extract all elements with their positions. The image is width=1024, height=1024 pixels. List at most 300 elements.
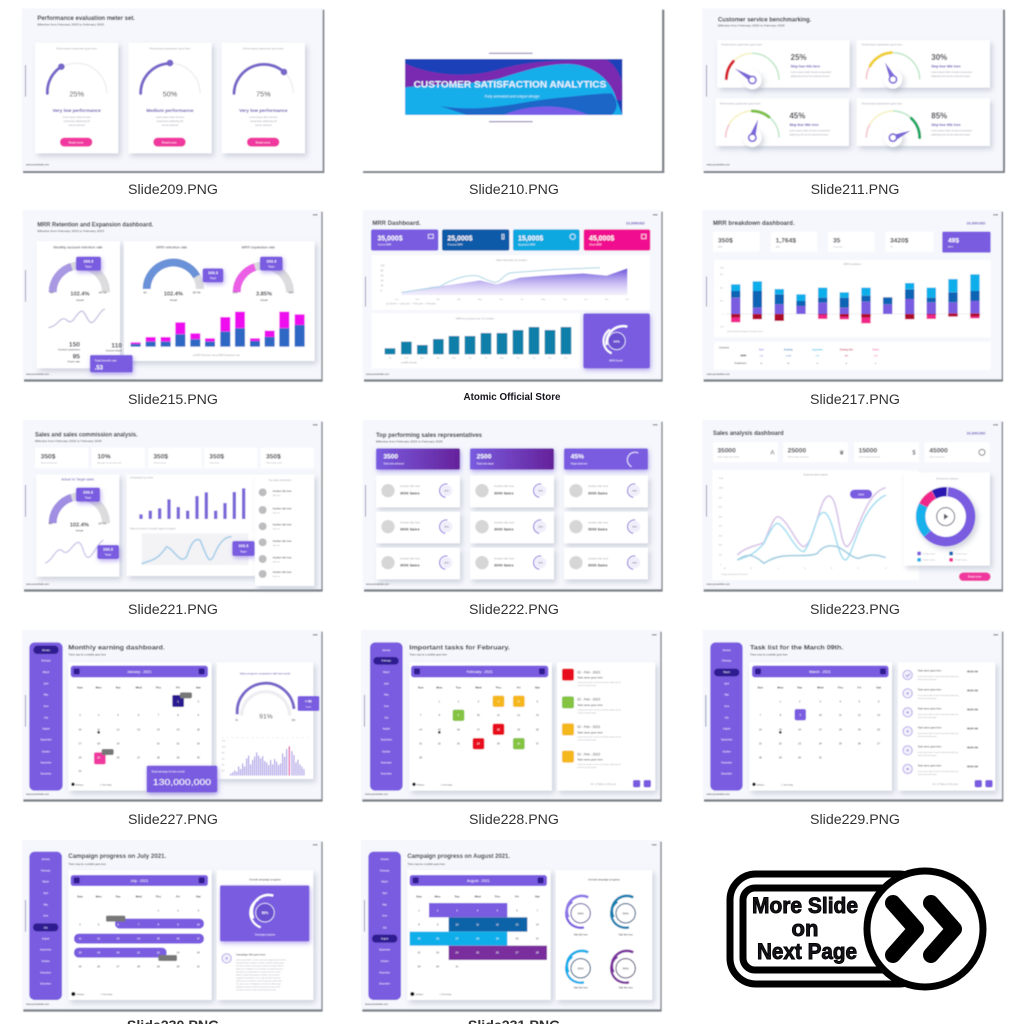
thumbnail: Slide222 top sales representatives: Another title here xyxy=(494,557,515,561)
thumbnail: Slide229 task list calendar: ◻ Task today xyxy=(781,783,793,786)
thumbnail: Slide227 monthly earning calendar: 8 xyxy=(177,713,179,717)
thumbnail: Slide231 campaign progress August: 23 xyxy=(436,951,440,955)
thumbnail: Slide231 campaign progress August: March xyxy=(381,881,389,884)
thumbnail: Slide216 MRR dashboard: Sep xyxy=(563,299,568,301)
thumbnail: Slide221 sales commission analysis: Sales by month vs monthly target for quarter xyxy=(130,527,176,530)
thumbnail: Slide231 campaign progress August: Sun xyxy=(416,894,422,898)
thumbnail: Slide223 sales analysis dashboard: 10,000USD xyxy=(967,431,986,435)
thumbnail: Slide227 monthly earning calendar: 28 xyxy=(157,755,160,759)
thumbnail: Slide216 MRR dashboard: 10,000USD xyxy=(626,221,645,225)
thumbnail: Slide230 campaign progress July: irure dolor in reprehenderit in voluptate velit esse cillum xyxy=(236,971,281,974)
thumbnail: Slide216 MRR dashboard: 20 xyxy=(381,286,384,288)
thumbnail: Slide228 important tasks calendar: 16 xyxy=(457,727,460,731)
badge text xyxy=(752,893,858,964)
thumbnail: Slide229 task list calendar: 28 xyxy=(759,755,762,759)
thumbnail: Slide217 MRR breakdown dashboard: 170 xyxy=(874,356,878,358)
thumbnail: Slide223 sales analysis dashboard: Product A Product B Product C xyxy=(721,573,749,576)
thumbnail: Slide211 customer service gauges: adipiscing elit sed do eiusmod tempor xyxy=(789,134,829,137)
thumbnail: Slide217 MRR breakdown dashboard: ARPU xyxy=(948,246,954,249)
thumbnail: Slide230 campaign progress July: 20 xyxy=(117,951,120,955)
thumbnail: Slide228 important tasks calendar: January xyxy=(382,649,391,652)
thumbnail: Slide231 campaign progress August: May xyxy=(382,904,388,906)
thumbnail: Slide211 customer service gauges: Step four title here xyxy=(789,123,819,127)
thumbnail: Slide228 important tasks calendar: Tue xyxy=(456,685,461,689)
thumbnail: Slide217 MRR breakdown dashboard: 3420$ xyxy=(890,238,909,245)
thumbnail: Slide228 important tasks calendar: October xyxy=(382,750,391,753)
thumbnail: Slide215 MRR retention dashboard xyxy=(23,210,323,382)
thumbnail: Slide230 campaign progress July: March xyxy=(42,881,50,884)
thumbnail: Slide222 top sales representatives: Total units achieved xyxy=(383,462,404,465)
thumbnail: Slide221 sales commission analysis: 102.4% xyxy=(70,523,89,529)
thumbnail: Slide222 top sales representatives: 90% xyxy=(444,527,449,529)
thumbnail: Slide223 sales analysis dashboard: Revenue by category xyxy=(936,478,959,481)
thumbnail: Slide231 campaign progress August: Thu xyxy=(495,894,500,898)
thumbnail: Slide229 task list calendar: January xyxy=(722,649,732,652)
badge: More Slide on Next Page xyxy=(730,871,983,987)
thumbnail: Slide227 monthly earning calendar: 5 xyxy=(117,713,119,717)
thumbnail: Slide231 campaign progress August: October xyxy=(381,960,389,963)
thumbnail: Slide227 monthly earning calendar xyxy=(22,630,323,802)
thumbnail: Slide231 campaign progress August: November xyxy=(379,971,390,974)
thumbnail: Slide216 MRR dashboard: Nov xyxy=(548,358,552,360)
thumbnail: Slide209 performance meters xyxy=(22,8,324,173)
thumbnail: Slide216 MRR dashboard: Data rates/rate by location xyxy=(496,258,528,262)
thumbnail: Slide229 task list calendar: 30 xyxy=(798,755,802,759)
thumbnail: Slide228 important tasks calendar: Mon xyxy=(436,685,443,689)
thumbnail: Slide227 monthly earning calendar: September xyxy=(40,739,52,742)
thumbnail: Slide227 monthly earning calendar: 16 xyxy=(197,727,200,731)
thumbnail: Slide215 MRR retention dashboard: Total benefit rate xyxy=(95,358,117,362)
thumbnail: Slide230 campaign progress July: May xyxy=(43,904,49,906)
thumbnail: Slide217 MRR breakdown dashboard: 15 xyxy=(787,363,790,365)
thumbnail: Slide209 performance meters: Read more xyxy=(69,140,84,144)
thumbnail: Slide229 task list calendar: 18 xyxy=(839,727,842,731)
thumbnail: Slide221 sales commission analysis: Sub text xyxy=(273,494,280,497)
thumbnail: Slide223 sales analysis dashboard: Product name xyxy=(923,552,936,555)
thumbnail: Slide228 important tasks calendar: 5 xyxy=(518,699,520,703)
thumbnail: Slide217 MRR breakdown dashboard: 170 xyxy=(816,356,820,358)
thumbnail: Slide227 monthly earning calendar: Monthly earning dashboard. xyxy=(68,646,165,652)
thumbnail: Slide221 sales commission analysis: Another title here xyxy=(273,490,292,493)
thumbnail: Slide231 campaign progress August: 16 xyxy=(436,937,440,941)
caption: Slide221: Slide221.PNG xyxy=(128,602,218,618)
thumbnail: Slide216 MRR dashboard: May xyxy=(452,358,456,360)
thumbnail: Slide209 performance meters: sed do eiusmod xyxy=(68,125,86,127)
thumbnail: Slide230 campaign progress July: 12 xyxy=(97,937,101,941)
thumbnail: Slide231 campaign progress August: August xyxy=(381,938,389,941)
thumbnail: Slide231 campaign progress August: February xyxy=(380,869,390,872)
thumbnail: Slide229 task list calendar: 25 xyxy=(839,742,842,746)
thumbnail: Slide231 campaign progress August: Task title here xyxy=(618,933,634,936)
thumbnail: Slide216 MRR dashboard: 0 xyxy=(381,291,383,293)
thumbnail: Slide229 task list calendar: 08:00 AM xyxy=(967,727,978,730)
thumbnail: Slide216 MRR dashboard xyxy=(363,210,663,382)
thumbnail: Slide229 task list calendar: November xyxy=(721,761,732,764)
thumbnail: Slide210 title slide: CUSTOMER SATISFACTION ANALYTICS xyxy=(414,80,606,90)
thumbnail: Slide228 important tasks calendar: 23 xyxy=(457,742,460,746)
thumbnail: Slide229 task list calendar: 23 xyxy=(798,742,802,746)
thumbnail: Slide230 campaign progress July: Lorem ipsum dolor sit amet consectetur adipiscing elit sed do xyxy=(236,959,285,962)
thumbnail: Slide228 important tasks calendar: 21 xyxy=(419,742,423,746)
thumbnail: Slide215 MRR retention dashboard: 102.4% xyxy=(70,292,90,298)
thumbnail: Slide230 campaign progress July: inventore veritatis et quasi architecto beatae vitae xyxy=(236,989,276,992)
thumbnail: Slide231 campaign progress August: Task title here xyxy=(573,986,589,989)
thumbnail: Slide216 MRR dashboard: 100 xyxy=(381,266,385,268)
thumbnail: Slide231 campaign progress August: September xyxy=(379,949,391,952)
thumbnail: Slide230 campaign progress July: 26 xyxy=(97,965,101,969)
thumbnail: Slide215 MRR retention dashboard: MRR Retention and Expansion dashboard. xyxy=(37,223,154,229)
thumbnail: Slide231 campaign progress August: Task title here xyxy=(573,933,589,936)
thumbnail: Slide231 campaign progress August: 5 xyxy=(497,909,499,913)
thumbnail: Slide229 task list calendar: 16 xyxy=(798,727,802,731)
thumbnail: Slide229 task list calendar: Task name goes here xyxy=(918,670,942,673)
thumbnail: Slide215 MRR retention dashboard: 95 xyxy=(73,354,80,361)
thumbnail: Slide229 task list calendar: 31 xyxy=(819,755,822,759)
thumbnail: Slide228 important tasks calendar: 22 xyxy=(438,742,441,746)
thumbnail: Slide230 campaign progress July: October xyxy=(42,960,50,963)
thumbnail: Slide228 important tasks calendar: sed do eiusmod tempor xyxy=(577,711,597,714)
thumbnail: Slide228 important tasks calendar: September xyxy=(381,739,392,742)
thumbnail: Slide227 monthly earning calendar: 800 xyxy=(222,753,224,755)
thumbnail: Slide228 important tasks calendar: Task name goes here xyxy=(577,676,603,680)
thumbnail: Slide231 campaign progress August: Fri xyxy=(515,894,519,898)
thumbnail: Slide217 MRR breakdown dashboard: 8 xyxy=(846,363,848,365)
thumbnail: Slide211 customer service gauges: Performance parameter goes here xyxy=(862,43,903,47)
icon: double chevron circle xyxy=(867,871,983,987)
thumbnail: Slide217 MRR breakdown dashboard: MRR breakdown xyxy=(844,263,862,266)
thumbnail: Slide216 MRR dashboard: Sep xyxy=(516,358,521,360)
thumbnail: Slide211 customer service gauges: 30% xyxy=(931,53,947,62)
thumbnail: Slide221 sales commission analysis: Sub text xyxy=(273,560,280,563)
thumbnail: Slide230 campaign progress July: 19 xyxy=(97,951,101,955)
thumbnail: Slide222 top sales representatives: Another title here xyxy=(588,484,609,488)
thumbnail: Slide222 top sales representatives: Another title here xyxy=(400,520,421,524)
thumbnail: Slide227 monthly earning calendar: 12 xyxy=(117,727,120,731)
thumbnail: Slide227 monthly earning calendar: ◻ Task today xyxy=(100,783,112,786)
caption: Slide209: Slide209.PNG xyxy=(128,182,218,198)
thumbnail: Slide230 campaign progress July: 8 xyxy=(158,923,160,927)
thumbnail: Slide231 campaign progress August xyxy=(361,840,662,1012)
thumbnail: Slide231 campaign progress August: 9 xyxy=(437,923,439,927)
thumbnail: Slide227 monthly earning calendar: January - 2021 xyxy=(127,670,152,674)
thumbnail: Slide231 campaign progress August: April xyxy=(382,892,387,895)
thumbnail: Slide222 top sales representatives: ••• xyxy=(653,423,658,428)
thumbnail: Slide228 important tasks calendar: Lorem ipsum dolor sit amet consectetur adipiscing elit xyxy=(577,763,621,766)
thumbnail: Slide229 task list calendar: Lorem ipsum dolor sit amet consectetur adipiscing xyxy=(918,770,958,773)
thumbnail: Slide227 monthly earning calendar: July xyxy=(44,717,49,719)
thumbnail: Slide216 MRR dashboard: Oct xyxy=(584,298,588,301)
thumbnail: Slide229 task list calendar: April xyxy=(724,682,729,685)
thumbnail: Slide223 sales analysis dashboard: 1200 xyxy=(719,478,724,480)
thumbnail: Slide228 important tasks calendar: July xyxy=(384,717,389,719)
thumbnail: Slide223 sales analysis dashboard: www.yourwebsite.com xyxy=(707,583,730,586)
thumbnail: Slide216 MRR dashboard: May xyxy=(478,299,482,301)
thumbnail: Slide227 monthly earning calendar: June xyxy=(43,706,49,708)
thumbnail: Slide209 performance meters: Very low performance xyxy=(52,108,101,113)
thumbnail: Slide230 campaign progress July: 15 xyxy=(157,937,160,941)
thumbnail: Slide221 sales commission analysis: 103.3 xyxy=(238,543,249,548)
thumbnail: Slide230 campaign progress July: Campaign title goes here xyxy=(236,953,266,957)
thumbnail: Slide230 campaign progress July: 1 xyxy=(158,909,160,913)
thumbnail: Slide215 MRR retention dashboard: 102.4% xyxy=(164,292,183,298)
thumbnail: Slide215 MRR retention dashboard: Actual xyxy=(260,298,268,302)
thumbnail: Slide231 campaign progress August: Task title here xyxy=(618,986,634,989)
thumbnail: Slide215 MRR retention dashboard: MRR retention rate xyxy=(156,245,187,249)
thumbnail: Slide223 sales analysis dashboard: Total commission paid xyxy=(859,455,881,458)
thumbnail: Slide230 campaign progress July: 4 xyxy=(79,923,81,927)
thumbnail: Slide231 campaign progress August: Overall campaign progress xyxy=(588,878,621,882)
thumbnail: Slide231 campaign progress August: 15 xyxy=(418,937,421,941)
thumbnail: Slide228 important tasks calendar: There may be a subtitle goes here xyxy=(409,653,448,656)
thumbnail: Slide216 MRR dashboard: Mar xyxy=(421,357,424,360)
thumbnail: Slide223 sales analysis dashboard: B xyxy=(751,568,753,570)
thumbnail: Slide216 MRR dashboard: Jul xyxy=(521,299,524,301)
thumbnail: Slide221 sales commission analysis: 103.3 xyxy=(103,547,114,552)
thumbnail: Slide229 task list calendar: Fri xyxy=(857,685,861,689)
thumbnail: Slide216 MRR dashboard: 35,000$ xyxy=(377,236,403,243)
thumbnail: Slide227 monthly earning calendar: Fri xyxy=(176,685,180,689)
thumbnail: Slide221 sales commission analysis: Another title here xyxy=(273,540,292,543)
thumbnail: Slide222 top sales representatives: Total units target xyxy=(477,462,494,465)
thumbnail: Slide222 top sales representatives: 90% xyxy=(632,527,637,529)
thumbnail: Slide227 monthly earning calendar: 9 xyxy=(198,713,200,717)
thumbnail: Slide209 performance meters: Lorem ipsum dolor sit amet xyxy=(249,116,278,119)
thumbnail: Slide230 campaign progress July: 22 xyxy=(157,951,160,955)
thumbnail: Slide231 campaign progress August: 4 xyxy=(477,909,479,913)
thumbnail: Slide231 campaign progress August: 6 xyxy=(516,909,518,913)
thumbnail: Slide223 sales analysis dashboard: G xyxy=(885,568,887,570)
thumbnail: Slide217 MRR breakdown dashboard xyxy=(702,210,1003,382)
thumbnail: Slide229 task list calendar: No. of Tasks on this year xyxy=(933,783,958,786)
thumbnail: Slide227 monthly earning calendar: 24 xyxy=(79,755,82,759)
thumbnail: Slide217 MRR breakdown dashboard: 10,000USD xyxy=(967,221,986,225)
thumbnail: Slide227 monthly earning calendar: 17 xyxy=(79,742,82,746)
thumbnail: Slide223 sales analysis dashboard: 0 xyxy=(720,564,722,566)
thumbnail: Slide216 MRR dashboard: MRR by product over 12 months xyxy=(456,317,495,321)
thumbnail: Slide221 sales commission analysis: 350$ xyxy=(209,453,224,460)
thumbnail: Slide217 MRR breakdown dashboard: 140 xyxy=(760,356,764,358)
thumbnail: Slide230 campaign progress July xyxy=(22,840,323,1012)
thumbnail: Slide209 performance meters: Read more xyxy=(162,140,177,144)
thumbnail: Slide227 monthly earning calendar: + 90 xyxy=(305,700,312,704)
thumbnail: Slide217 MRR breakdown dashboard: 400 xyxy=(720,287,723,289)
thumbnail: Slide230 campaign progress July: June xyxy=(43,916,49,918)
thumbnail: Slide217 MRR breakdown dashboard: -100 xyxy=(720,327,723,329)
thumbnail: Slide228 important tasks calendar: ••• xyxy=(652,633,657,638)
thumbnail: Slide229 task list calendar: September xyxy=(721,739,733,742)
thumbnail: Slide215 MRR retention dashboard: Churn rate xyxy=(67,360,81,364)
thumbnail: Slide211 customer service gauges: Performance parameter goes here xyxy=(721,43,762,47)
thumbnail: Slide211 customer service gauges: 45% xyxy=(789,112,805,121)
thumbnail: Slide211 customer service gauges: Performance parameter goes here xyxy=(720,101,761,105)
thumbnail: Slide230 campaign progress July: ◻ Task today xyxy=(101,993,112,996)
thumbnail: Slide230 campaign progress July: Mon xyxy=(96,894,102,898)
thumbnail: Slide229 task list calendar: Tue xyxy=(797,685,803,689)
thumbnail: Slide221 sales commission analysis: Target xyxy=(240,550,247,553)
thumbnail: Slide228 important tasks calendar: Lorem ipsum dolor sit amet consectetur adipiscing elit xyxy=(577,708,621,711)
caption: Slide228: Slide228.PNG xyxy=(469,812,559,828)
thumbnail: Slide221 sales commission analysis: Total target sales xyxy=(266,462,282,465)
thumbnail: Slide229 task list calendar: ••• xyxy=(993,633,999,638)
thumbnail: Slide227 monthly earning calendar: Wed xyxy=(136,685,142,689)
thumbnail: Slide229 task list calendar: www.yourwebsite.com xyxy=(707,793,730,796)
thumbnail: Slide221 sales commission analysis: Average commission rate xyxy=(97,462,122,465)
thumbnail: Slide229 task list calendar: Lorem ipsum dolor sit amet consectetur adipiscing xyxy=(918,732,958,735)
thumbnail: Slide217 MRR breakdown dashboard: Churn xyxy=(872,349,880,352)
thumbnail: Slide230 campaign progress July: 7 xyxy=(138,923,140,927)
thumbnail: Slide228 important tasks calendar: April xyxy=(384,682,389,685)
thumbnail: Slide228 important tasks calendar: 8 xyxy=(439,713,441,717)
thumbnail: Slide211 customer service gauges: www.yourwebsite.com xyxy=(707,164,730,167)
thumbnail: Slide230 campaign progress July: mollit anim id est laborum sed ut perspiciatis unde omnis xyxy=(236,980,282,983)
thumbnail: Slide223 sales analysis dashboard: 300 xyxy=(719,545,723,547)
thumbnail: Slide227 monthly earning calendar: 19 xyxy=(117,742,120,746)
thumbnail: Slide230 campaign progress July: laboris nisi ut aliquip ex ea commodo consequat duis aute xyxy=(236,968,283,971)
thumbnail: Slide228 important tasks calendar: 10 xyxy=(477,713,480,717)
thumbnail: Slide215 MRR retention dashboard: 3.85% xyxy=(256,292,272,298)
thumbnail: Slide231 campaign progress August: December xyxy=(379,983,390,986)
thumbnail: Slide217 MRR breakdown dashboard: ARR xyxy=(776,246,780,249)
thumbnail: Slide230 campaign progress July: September xyxy=(40,949,52,952)
thumbnail: Slide221 sales commission analysis: 10% xyxy=(97,453,111,460)
thumbnail: Slide216 MRR dashboard: Aug xyxy=(500,357,504,360)
thumbnail: Slide222 top sales representatives: Target achieved xyxy=(571,462,588,465)
thumbnail: Slide231 campaign progress August: 7 xyxy=(537,909,539,913)
thumbnail: Slide231 campaign progress August: 17 xyxy=(456,937,459,941)
thumbnail: Slide217 MRR breakdown dashboard: Customers xyxy=(833,246,843,249)
thumbnail: Slide229 task list calendar: Lorem ipsum dolor sit amet consectetur adipiscing xyxy=(918,694,958,697)
thumbnail: Slide231 campaign progress August: 18 xyxy=(476,937,480,941)
thumbnail: Slide217 MRR breakdown dashboard: New xyxy=(759,349,764,352)
thumbnail: Slide217 MRR breakdown dashboard: MRR breakdown dashboard. xyxy=(713,221,795,227)
thumbnail: Slide230 campaign progress July: 21 xyxy=(137,951,141,955)
thumbnail: Slide216 MRR dashboard: Jan xyxy=(395,299,398,301)
thumbnail: Slide215 MRR retention dashboard: Current churn xyxy=(106,348,123,352)
thumbnail: Slide222 top sales representatives: Another title here xyxy=(400,484,421,488)
thumbnail: Slide217 MRR breakdown dashboard: Upgrades xyxy=(812,349,823,352)
thumbnail: Slide209 performance meters: 25% xyxy=(69,89,84,98)
thumbnail: Slide230 campaign progress July: Sat xyxy=(196,894,201,898)
thumbnail: Slide227 monthly earning calendar: 31 xyxy=(79,769,82,773)
thumbnail: Slide230 campaign progress July: 18 xyxy=(79,951,82,955)
thumbnail: Slide223 sales analysis dashboard: 15000 xyxy=(859,447,877,454)
thumbnail: Slide229 task list calendar: sed do eiusmod tempor xyxy=(918,678,937,681)
thumbnail: Slide227 monthly earning calendar: 4 xyxy=(98,713,100,717)
thumbnail: Slide223 sales analysis dashboard: Sales target achieved xyxy=(788,455,809,458)
thumbnail: Slide229 task list calendar: Thu xyxy=(838,685,843,689)
thumbnail: Slide227 monthly earning calendar: December xyxy=(41,773,52,776)
thumbnail: Slide222 top sales representatives: 90% xyxy=(538,491,543,493)
thumbnail: Slide217 MRR breakdown dashboard: LTV xyxy=(890,247,894,249)
thumbnail: Slide215 MRR retention dashboard: Actual xyxy=(76,298,84,302)
caption: Slide211: Slide211.PNG xyxy=(811,182,899,198)
thumbnail: Slide228 important tasks calendar: 02 - Feb - 2023 xyxy=(577,725,600,729)
thumbnail: Slide223 sales analysis dashboard: 45000 xyxy=(929,447,948,454)
thumbnail: Slide215 MRR retention dashboard: Target xyxy=(85,265,92,268)
thumbnail: Slide231 campaign progress August: August - 2021 xyxy=(467,879,490,883)
thumbnail: Slide229 task list calendar: 08:00 AM xyxy=(967,690,978,693)
thumbnail: Slide229 task list calendar: sed do eiusmod tempor xyxy=(918,716,937,719)
thumbnail: Slide228 important tasks calendar: 14 xyxy=(419,727,423,731)
thumbnail: Slide230 campaign progress July: Fri xyxy=(176,894,180,898)
thumbnail: Slide215 MRR retention dashboard: Current customers xyxy=(58,348,81,352)
thumbnail: Slide210 title slide: Fully animated and unique design xyxy=(485,94,539,98)
thumbnail: Slide228 important tasks calendar: Important tasks for February. xyxy=(409,646,510,652)
thumbnail: Slide231 campaign progress August: 13 xyxy=(515,923,519,927)
thumbnail: Slide221 sales commission analysis: 0% xyxy=(49,523,52,525)
thumbnail: Slide227 monthly earning calendar: Target xyxy=(306,706,312,709)
caption: Slide229: Slide229.PNG xyxy=(810,812,900,828)
thumbnail: Slide229 task list calendar: 2 xyxy=(799,699,801,703)
thumbnail: Slide221 sales commission analysis: Another title here xyxy=(273,524,292,527)
thumbnail: Slide221 sales commission analysis: Actual Vs Target sales xyxy=(61,478,94,482)
thumbnail: Slide209 performance meters: 75% xyxy=(256,89,271,98)
thumbnail: Slide217 MRR breakdown dashboard: Customers xyxy=(734,362,747,365)
thumbnail: Slide229 task list calendar: 11 xyxy=(839,713,842,717)
thumbnail: Slide221 sales commission analysis: 103.3 xyxy=(83,489,94,494)
thumbnail: Slide215 MRR retention dashboard: Effective from February 2023 to February 2025 xyxy=(37,229,105,233)
thumbnail: Slide223 sales analysis dashboard: $ xyxy=(912,450,916,456)
thumbnail: Slide223 sales analysis dashboard: 900 xyxy=(719,497,723,499)
thumbnail: Slide227 monthly earning calendar: 21 xyxy=(157,742,160,746)
thumbnail: Slide228 important tasks calendar xyxy=(361,630,662,802)
thumbnail: Slide227 monthly earning calendar: 6 xyxy=(138,713,140,717)
thumbnail: Slide230 campaign progress July: Thu xyxy=(156,894,161,898)
thumbnail: Slide227 monthly earning calendar: 600 xyxy=(222,759,224,761)
thumbnail: Slide227 monthly earning calendar: November xyxy=(41,761,52,764)
thumbnail: Slide222 top sales representatives: 3000 Sales xyxy=(494,564,514,568)
thumbnail: Slide215 MRR retention dashboard: 40T 0% xyxy=(99,293,107,295)
thumbnail: Slide229 task list calendar: 4 xyxy=(840,699,842,703)
thumbnail: Slide215 MRR retention dashboard: 103.3 xyxy=(83,258,94,263)
thumbnail: Slide230 campaign progress July: 6 xyxy=(117,923,119,927)
thumbnail: Slide216 MRR dashboard: 15,000$ xyxy=(518,236,543,243)
thumbnail: Slide228 important tasks calendar: sed do eiusmod tempor xyxy=(577,766,597,769)
thumbnail: Slide229 task list calendar: 12 xyxy=(858,713,861,717)
thumbnail: Slide231 campaign progress August: 21 xyxy=(536,937,539,941)
thumbnail: Slide229 task list calendar: Lorem ipsum dolor sit amet consectetur adipiscing xyxy=(918,713,958,716)
thumbnail: Slide231 campaign progress August: 26 xyxy=(496,951,499,955)
thumbnail: Slide215 MRR retention dashboard: Monthly account retention rate xyxy=(53,245,103,249)
thumbnail: Slide227 monthly earning calendar: ••• xyxy=(313,633,318,638)
thumbnail: Slide229 task list calendar: August xyxy=(723,728,731,731)
thumbnail: Slide222 top sales representatives: 3000 Sales xyxy=(588,491,608,495)
thumbnail: Slide211 customer service gauges: Customer service benchmarking. xyxy=(718,18,812,24)
thumbnail: Slide230 campaign progress July: 11 xyxy=(79,937,82,941)
thumbnail: Slide222 top sales representatives: 3000 Sales xyxy=(400,491,420,495)
thumbnail: Slide223 sales analysis dashboard: F xyxy=(858,568,860,570)
thumbnail: Slide231 campaign progress August: There may be a subtitle goes here xyxy=(407,863,446,866)
thumbnail: Slide231 campaign progress August: 28 xyxy=(536,951,539,955)
thumbnail: Slide223 sales analysis dashboard: Product name xyxy=(955,559,968,562)
thumbnail: Slide215 MRR retention dashboard: Target xyxy=(268,265,275,268)
thumbnail: Slide231 campaign progress August: ◻ Task today xyxy=(440,993,451,996)
thumbnail: Slide221 sales commission analysis: 350$ xyxy=(266,453,281,460)
thumbnail: Slide223 sales analysis dashboard: A xyxy=(724,567,726,570)
thumbnail: Slide227 monthly earning calendar: 100 xyxy=(291,720,296,722)
thumbnail: Slide216 MRR dashboard: 25,000$ xyxy=(447,236,473,243)
thumbnail: Slide229 task list calendar: October xyxy=(722,750,731,753)
thumbnail: Slide229 task list calendar: sed do eiusmod tempor xyxy=(918,754,937,757)
thumbnail: Slide216 MRR dashboard: Churn MRR xyxy=(589,244,602,247)
thumbnail: Slide228 important tasks calendar: December xyxy=(381,773,392,776)
thumbnail: Slide227 monthly earning calendar: Tue xyxy=(115,685,121,689)
thumbnail: Slide227 monthly earning calendar: Mon xyxy=(96,685,102,689)
thumbnail: Slide231 campaign progress August: Mon xyxy=(435,894,441,898)
thumbnail: Slide216 MRR dashboard: Mar xyxy=(437,298,440,301)
thumbnail: Slide228 important tasks calendar: March xyxy=(383,671,390,674)
thumbnail: Slide209 performance meters: Very low performance xyxy=(239,108,288,113)
